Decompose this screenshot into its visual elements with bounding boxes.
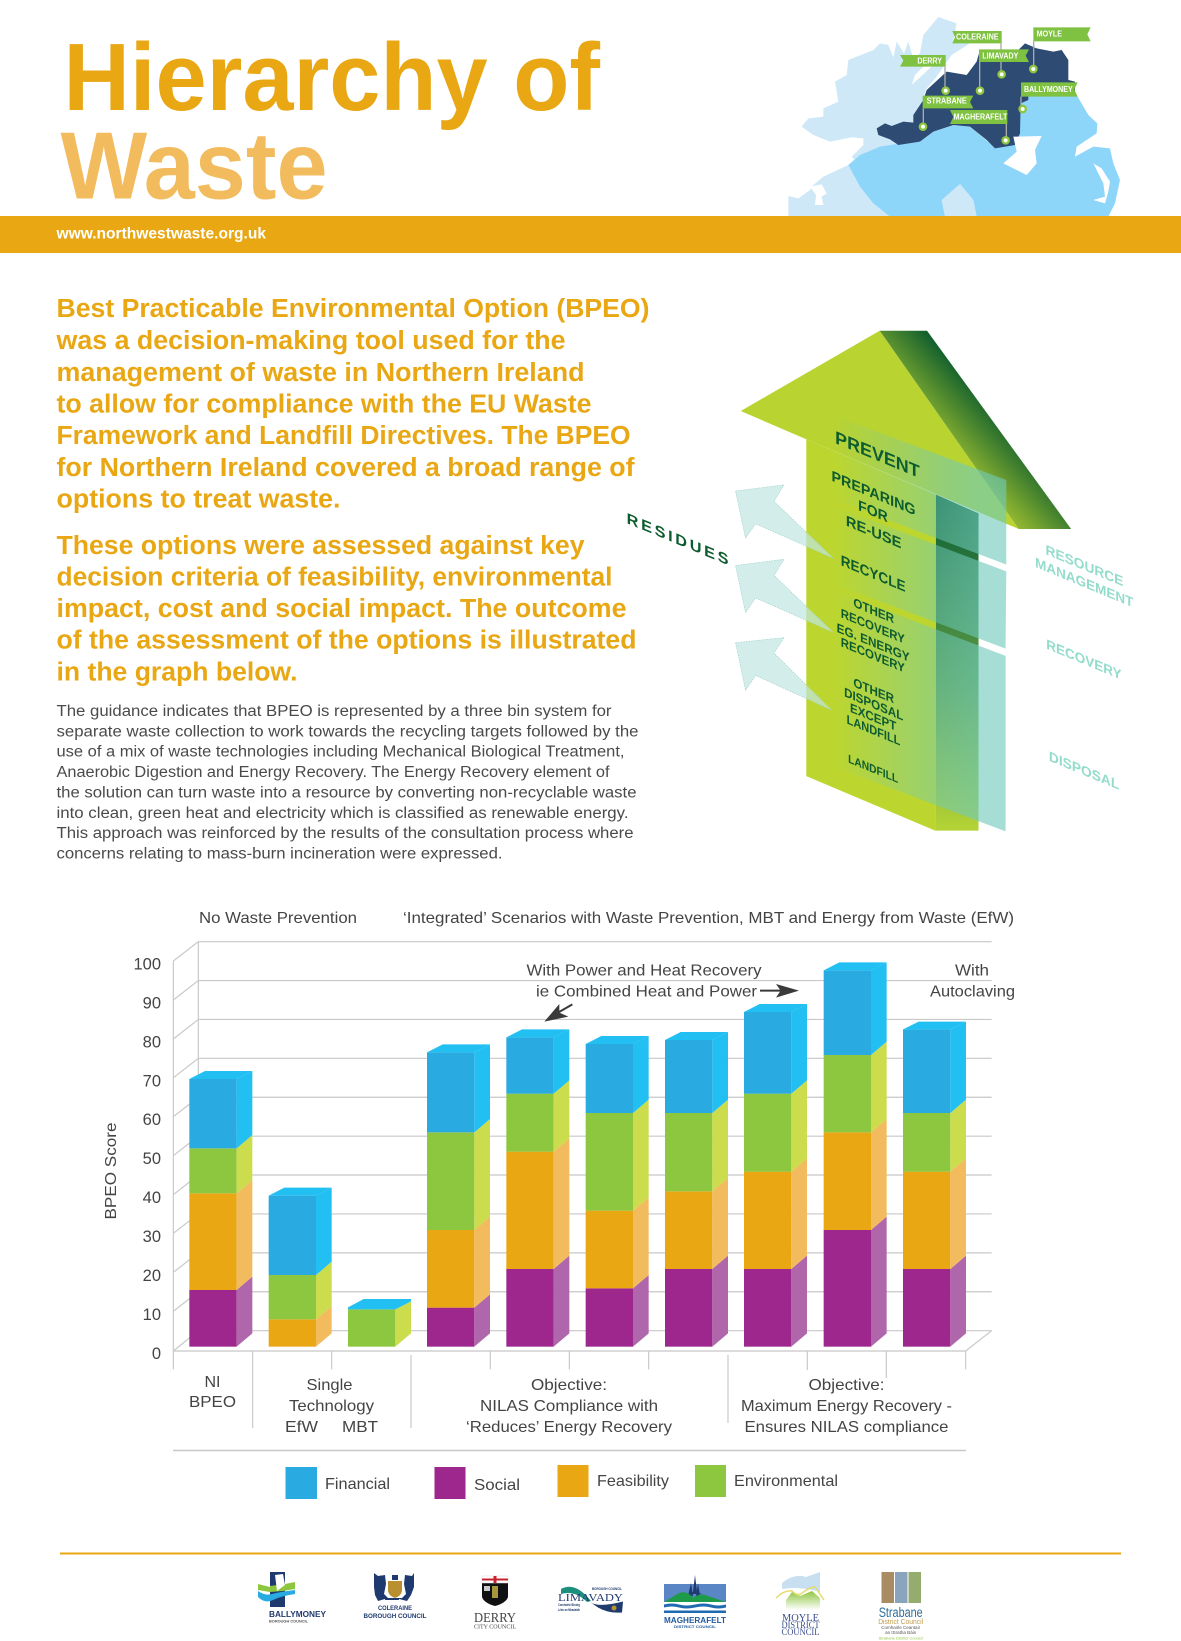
hierarchy level labels: LANDFILL [848, 751, 898, 786]
logo: Derry [474, 1576, 516, 1630]
arrow head shadow side [880, 331, 1071, 529]
annotation: power and heat recovery: With Power and Heat Recovery [526, 963, 762, 980]
flag: Coleraine [952, 31, 1002, 43]
body paragraph: the solution can turn waste into a resource by converting non-recyclable waste [56, 784, 636, 801]
waste hierarchy arrow diagram [627, 331, 1133, 831]
y axis labels: 0 [152, 1345, 161, 1363]
legend: environmental [695, 1465, 838, 1497]
flag: Derry [900, 55, 946, 67]
arrow shaft [806, 439, 936, 831]
arrow shaft side strip [936, 494, 979, 831]
x axis group labels: MBT [342, 1419, 378, 1436]
logo: Magherafelt: MAGHERAFELT [664, 1616, 726, 1625]
legend: environmental: Environmental [734, 1473, 838, 1490]
hierarchy level labels: PREVENT [835, 427, 920, 483]
hierarchy level labels: EXCEPT [850, 700, 897, 734]
hierarchy level labels: RECYCLE [841, 552, 906, 596]
legend: social: Social [474, 1477, 520, 1494]
legend [286, 1465, 838, 1499]
flag: Moyle: MOYLE [1037, 30, 1063, 39]
logo: Limavady: BOROUGH COUNCIL [592, 1587, 623, 1591]
x axis group labels: Single [306, 1377, 353, 1394]
flag: Coleraine: COLERAINE [956, 32, 999, 41]
intro heading text: management of waste in Northern Ireland [56, 359, 584, 387]
x axis group labels: Ensures NILAS compliance [744, 1419, 949, 1436]
intro heading text: to allow for compliance with the EU Waste [56, 390, 592, 418]
logo: Magherafelt: DISTRICT COUNCIL [674, 1624, 717, 1629]
intro heading text: Framework and Landfill Directives. The BPEO [56, 422, 630, 450]
flag: Strabane: STRABANE [927, 97, 967, 106]
body paragraph: into clean, green heat and electricity which is classified as renewable energy. [56, 805, 628, 822]
bar: maximum energy recovery 3 (autoclaving) [903, 1022, 966, 1347]
x axis group labels: NILAS Compliance with [480, 1398, 658, 1415]
logo: Limavady: Léim an Mhadaidh [558, 1608, 580, 1612]
bar: single technology MBT [348, 1299, 411, 1347]
x axis group labels: Objective: [808, 1377, 884, 1394]
x axis group labels: ‘Reduces’ Energy Recovery [466, 1419, 672, 1436]
y axis labels: 90 [143, 994, 161, 1012]
residue arrow 2 [736, 559, 833, 632]
intro heading text: for Northern Ireland covered a broad range of [56, 454, 635, 482]
footer council logos [258, 1572, 924, 1640]
y axis labels: 20 [143, 1267, 161, 1285]
intro heading text: was a decision-making tool used for the [55, 327, 565, 355]
title: Waste [60, 112, 328, 220]
logo: Moyle [776, 1572, 824, 1637]
bar: reduces energy recovery 4 [665, 1032, 728, 1347]
body paragraph [56, 703, 639, 862]
criteria heading text [56, 532, 636, 686]
flag: Moyle [1033, 27, 1091, 41]
hierarchy level labels [831, 427, 920, 786]
footer rule [60, 1552, 1121, 1554]
body paragraph: use of a mix of waste technologies including Mechanical Biological Treatment, [56, 744, 624, 761]
map markers [919, 65, 1038, 145]
flag: Limavady [979, 49, 1029, 62]
y axis labels [133, 956, 161, 1363]
y axis labels: 70 [143, 1072, 161, 1090]
flag: Magherafelt [950, 110, 1007, 124]
hierarchy level labels: FOR [858, 497, 888, 526]
hierarchy level labels: DISPOSAL [844, 684, 904, 724]
logo: Strabane [878, 1572, 924, 1640]
outer category labels: MANAGEMENT [1035, 555, 1133, 611]
title: Hierarchy of [64, 24, 601, 131]
label: residues: RESIDUES [627, 510, 729, 569]
bar: maximum energy recovery 1 [744, 1004, 807, 1347]
hierarchy level labels: LANDFILL [847, 711, 901, 749]
flag: Limavady: LIMAVADY [982, 51, 1019, 60]
annotation: power and heat recovery [526, 963, 762, 1001]
y axis labels: 50 [143, 1150, 161, 1168]
logo: Magherafelt [664, 1575, 726, 1629]
legend: financial [286, 1467, 390, 1499]
y axis labels: 100 [133, 956, 161, 974]
outer category labels [1035, 542, 1133, 794]
y axis title: BPEO Score [103, 1122, 120, 1220]
hierarchy level labels: OTHER [853, 675, 894, 706]
flag: Derry: DERRY [917, 56, 943, 65]
logo: Ballymoney: BOROUGH COUNCIL [269, 1618, 309, 1624]
logo: Strabane: an tSratha Báin [885, 1630, 917, 1635]
logo: Derry: CITY COUNCIL [474, 1624, 516, 1630]
x axis group labels: BPEO [189, 1394, 236, 1411]
logo: Ballymoney [258, 1572, 327, 1624]
flag: Ballymoney: BALLYMONEY [1024, 85, 1073, 94]
legend: feasibility [558, 1465, 669, 1497]
hierarchy level labels: RECOVERY [841, 634, 905, 676]
logo: Coleraine: COLERAINE [378, 1605, 413, 1612]
x axis group labels: Technology [289, 1398, 374, 1415]
legend: social [434, 1467, 520, 1499]
y axis labels: 10 [143, 1306, 161, 1324]
criteria heading text: decision criteria of feasibility, environmental [56, 564, 612, 592]
x axis group labels: Maximum Energy Recovery - [741, 1398, 952, 1415]
chart axes and gridlines [173, 942, 992, 1428]
logo: Limavady: LIMAVADY [558, 1593, 623, 1604]
arrow: pointing down-left to bar [544, 1004, 572, 1022]
annotation: with autoclaving: Autoclaving [930, 984, 1015, 1001]
translucent band: resource management [833, 415, 1006, 564]
intro heading text [55, 295, 649, 514]
logo: Strabane: Comhairle Ceantair [881, 1625, 921, 1630]
annotation: with autoclaving: With [955, 963, 989, 980]
criteria heading text: of the assessment of the options is illustrated [56, 626, 636, 654]
criteria heading text: in the graph below. [56, 658, 298, 686]
arrow head [741, 331, 1019, 529]
legend: financial: Financial [325, 1476, 390, 1493]
logo: Strabane: Strabane [879, 1605, 923, 1620]
logo: Strabane: District Council [878, 1619, 924, 1626]
hierarchy level labels: RE-USE [846, 513, 902, 552]
chart headings: ‘Integrated’ Scenarios with Waste Prevention, MBT and Energy from Waste (EfW) [403, 910, 1014, 927]
translucent band: disposal [833, 590, 1006, 831]
criteria heading text: These options were assessed against key [56, 532, 585, 560]
intro heading text: options to treat waste. [56, 486, 340, 514]
logo: Moyle: DISTRICT [782, 1620, 820, 1630]
chart headings: No Waste Prevention [199, 910, 357, 927]
map: land masses [788, 17, 1120, 217]
y axis labels: 30 [143, 1228, 161, 1246]
bar: single technology EfW [269, 1188, 332, 1347]
logo: Ballymoney: BALLYMONEY [269, 1610, 327, 1619]
flag: Magherafelt: MAGHERAFELT [954, 112, 1007, 121]
chart: BPEO scores stacked bars [103, 910, 1015, 1436]
body paragraph: Anaerobic Digestion and Energy Recovery. The Energy Recovery element of [56, 764, 610, 781]
hierarchy level labels: OTHER [853, 595, 894, 626]
x axis group labels: Objective: [531, 1377, 607, 1394]
hierarchy level labels: EG. ENERGY [837, 620, 910, 665]
flag: Ballymoney [1021, 82, 1078, 97]
flag: Strabane [923, 96, 973, 108]
outer category labels: DISPOSAL [1049, 749, 1119, 794]
residue arrow 3 [736, 638, 831, 710]
logo: Limavady [558, 1587, 623, 1613]
legend: feasibility: Feasibility [597, 1473, 669, 1490]
logo: Coleraine [364, 1573, 427, 1620]
hierarchy level labels: PREPARING [831, 468, 916, 519]
logo: Strabane: Strabane District Council [879, 1636, 923, 1640]
annotation: power and heat recovery: ie Combined Heat and Power [536, 984, 758, 1001]
orange header band [0, 216, 1181, 253]
body paragraph: This approach was reinforced by the results of the consultation process where [56, 825, 634, 842]
bar: reduces energy recovery 3 [586, 1036, 649, 1347]
x axis group labels [189, 1374, 952, 1436]
bar: reduces energy recovery 1 [427, 1044, 490, 1347]
hierarchy level labels: RECOVERY [841, 605, 905, 647]
logo: Derry: DERRY [474, 1611, 516, 1626]
bar: maximum energy recovery 2 [824, 962, 887, 1347]
translucent band: recovery [833, 506, 1006, 649]
x axis group labels: NI [204, 1374, 220, 1391]
title [60, 24, 601, 220]
logo: Coleraine: BOROUGH COUNCIL [364, 1613, 427, 1620]
logo: Moyle: COUNCIL [782, 1627, 820, 1637]
bars [189, 962, 966, 1347]
map of Northern Ireland council areas [788, 17, 1120, 217]
outer category labels: RECOVERY [1046, 637, 1122, 683]
y axis labels: 80 [143, 1034, 161, 1052]
bar: reduces energy recovery 2 [506, 1029, 569, 1347]
annotation: with autoclaving [930, 963, 1015, 1001]
y axis labels: 40 [143, 1189, 161, 1207]
logo: Limavady: Comhairle Bhuirg [558, 1603, 580, 1607]
residue arrow 1 [736, 485, 833, 558]
logo: Moyle: MOYLE [782, 1613, 819, 1624]
arrow: pointing right to bar [760, 984, 799, 998]
website url: www.northwestwaste.org.uk [55, 226, 266, 242]
body paragraph: The guidance indicates that BPEO is represented by a three bin system for [56, 703, 612, 720]
criteria heading text: impact, cost and social impact. The outcome [56, 595, 626, 623]
body paragraph: separate waste collection to work towards the recycling targets followed by the [56, 723, 639, 740]
intro heading text: Best Practicable Environmental Option (BPEO) [56, 295, 650, 323]
y axis labels: 60 [143, 1111, 161, 1129]
body paragraph: concerns relating to mass-burn incineration were expressed. [56, 846, 502, 862]
outer category labels: RESOURCE [1046, 542, 1123, 590]
bar: NI BPEO [189, 1071, 252, 1347]
x axis group labels: EfW [285, 1419, 319, 1436]
